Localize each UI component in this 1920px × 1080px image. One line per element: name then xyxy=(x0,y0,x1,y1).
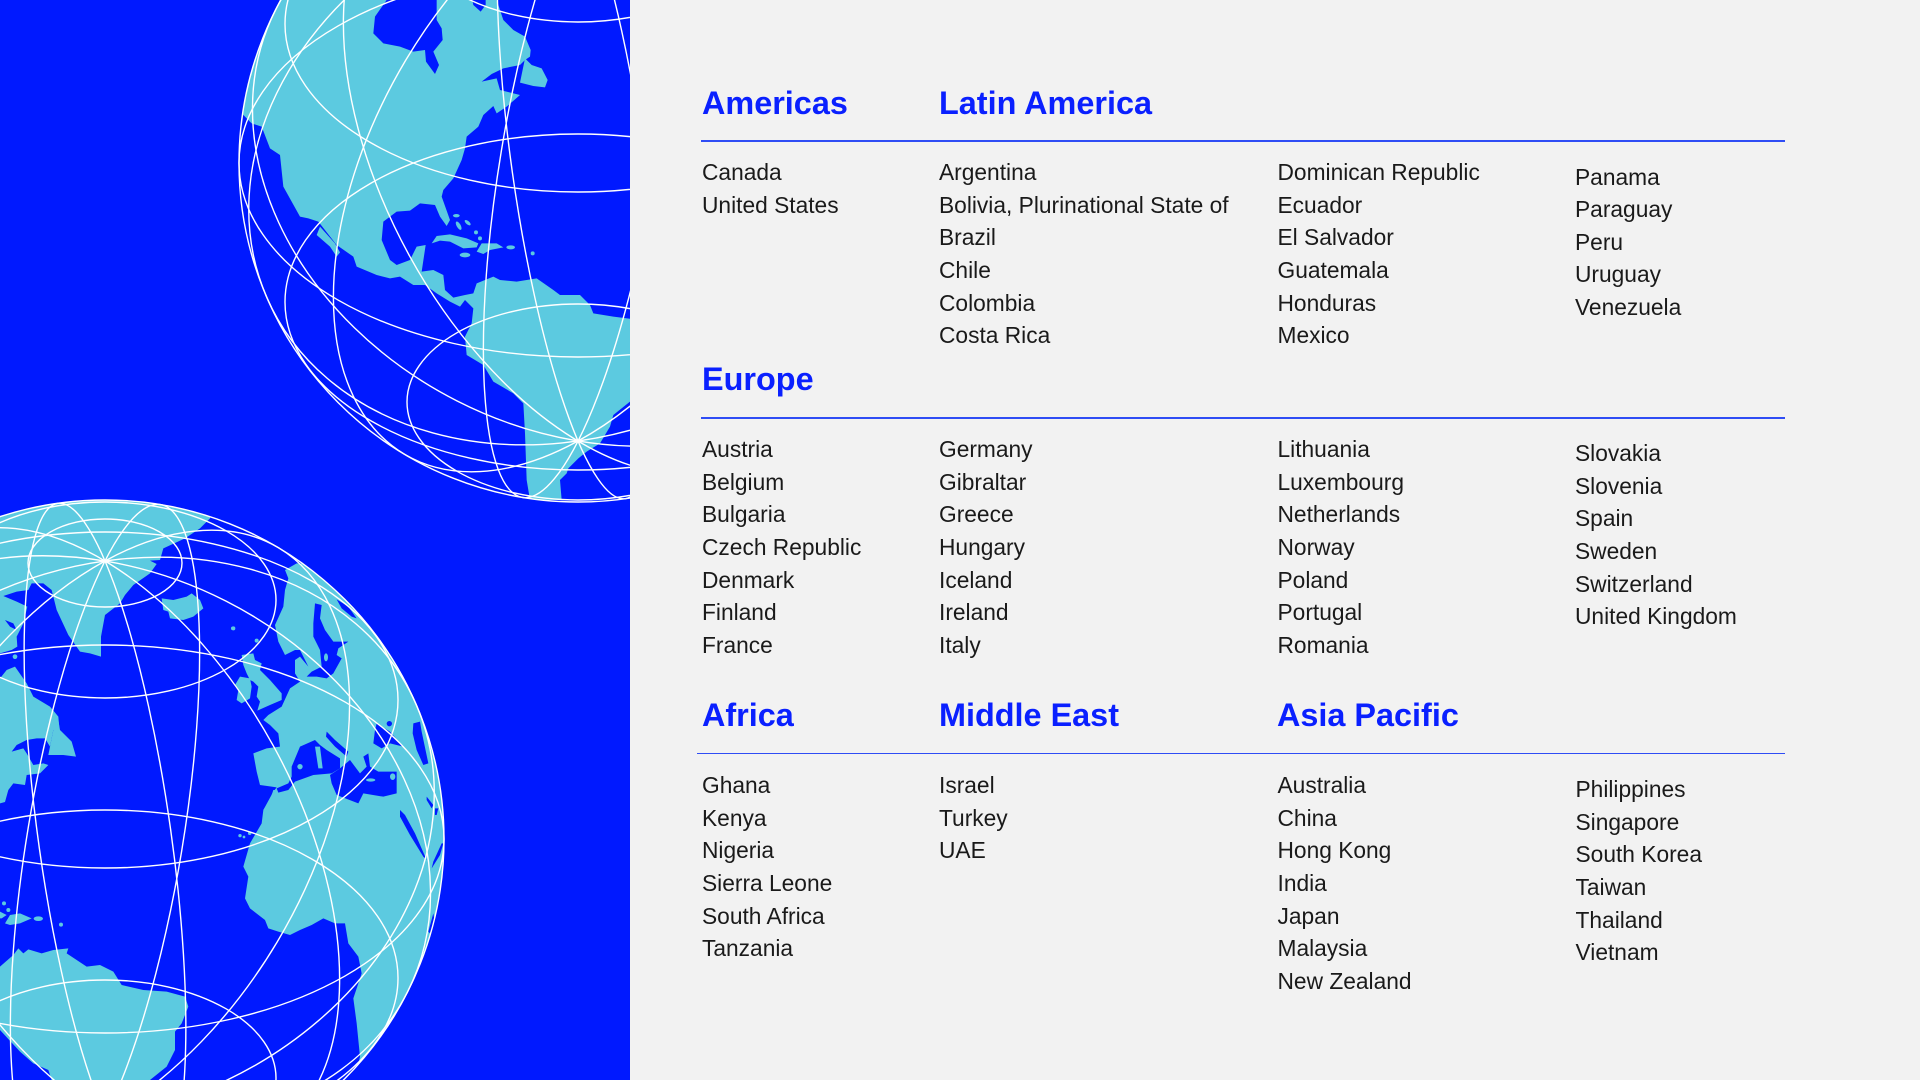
list: Middle East countries: Israel xyxy=(939,772,995,798)
list: Europe column 3: Portugal xyxy=(1278,599,1362,625)
list: Americas countries: United States xyxy=(702,192,839,218)
list: Latin America column 1: Argentina xyxy=(939,159,1036,185)
list: Asia Pacific column 2: Philippines xyxy=(1576,776,1686,802)
map: North and South America land xyxy=(243,0,630,500)
list: Europe column 4 xyxy=(1575,440,1737,629)
list: Asia Pacific column 2: Vietnam xyxy=(1576,939,1659,965)
list: Asia Pacific column 2: Thailand xyxy=(1576,907,1663,933)
list: Europe column 1: Austria xyxy=(702,436,773,462)
list: Europe column 2: Italy xyxy=(939,632,981,658)
list: Europe column 3: Luxembourg xyxy=(1278,469,1404,495)
list: Europe column 1: Belgium xyxy=(702,469,784,495)
list: Africa countries xyxy=(702,772,832,961)
list: Europe column 4: Slovakia xyxy=(1575,440,1661,466)
list: Americas countries: Canada xyxy=(702,159,782,185)
list: Latin America column 3: Peru xyxy=(1575,229,1623,255)
list: Asia Pacific column 1: Australia xyxy=(1278,772,1366,798)
list: Middle East countries xyxy=(939,772,1008,863)
list: Europe column 3: Norway xyxy=(1278,534,1355,560)
list: Europe column 1: Denmark xyxy=(702,567,794,593)
list: Europe column 4: United Kingdom xyxy=(1575,603,1737,629)
list: Latin America column 3: Paraguay xyxy=(1575,196,1672,222)
list: Europe column 2 xyxy=(939,436,1033,658)
list: Latin America column 2 xyxy=(1278,159,1480,348)
graticule: bottom globe wireframe xyxy=(0,445,528,1080)
list: Africa countries: Nigeria xyxy=(702,837,774,863)
list: Asia Pacific column 1: New Zealand xyxy=(1278,968,1412,994)
graticule: top globe wireframe xyxy=(155,0,1001,557)
list: Asia Pacific column 1: Japan xyxy=(1278,903,1340,929)
list: Asia Pacific column 2: Singapore xyxy=(1576,809,1679,835)
list: Europe column 2: Greece xyxy=(939,501,1014,527)
list: Europe column 1 xyxy=(702,436,861,658)
list: Latin America column 2: Dominican Republic xyxy=(1278,159,1480,185)
list: Africa countries: Tanzania xyxy=(702,935,793,961)
globe: Atlantic, Europe and Africa, bottom xyxy=(0,499,445,1080)
panel: blue globe illustration xyxy=(0,0,630,1080)
list: Asia Pacific column 2: South Korea xyxy=(1576,841,1702,867)
list: Europe column 2: Gibraltar xyxy=(939,469,1026,495)
list: Latin America column 1: Brazil xyxy=(939,224,996,250)
list: Asia Pacific column 1: India xyxy=(1278,870,1327,896)
list: Africa countries: Sierra Leone xyxy=(702,870,832,896)
list: Europe column 3: Romania xyxy=(1278,632,1369,658)
heading: Middle East: Middle East xyxy=(939,697,1119,733)
list: Europe column 4: Spain xyxy=(1575,505,1633,531)
list: Latin America column 1: Costa Rica xyxy=(939,322,1050,348)
list: Europe column 2: Iceland xyxy=(939,567,1012,593)
list: Europe column 1: Bulgaria xyxy=(702,501,785,527)
heading: Americas: Americas xyxy=(702,85,848,121)
list: Africa countries: Kenya xyxy=(702,805,767,831)
list: Asia Pacific column 1: Hong Kong xyxy=(1278,837,1391,863)
list: Asia Pacific column 2: Taiwan xyxy=(1576,874,1646,900)
list: Latin America column 2: Honduras xyxy=(1278,290,1376,316)
list: Africa countries: Ghana xyxy=(702,772,770,798)
list: Europe column 2: Germany xyxy=(939,436,1033,462)
list: Latin America column 1: Colombia xyxy=(939,290,1035,316)
globe: Americas, top xyxy=(238,0,630,503)
list: Latin America column 2: Ecuador xyxy=(1278,192,1362,218)
list: Europe column 2: Hungary xyxy=(939,534,1025,560)
list: Latin America column 3: Panama xyxy=(1575,164,1660,190)
list: Asia Pacific column 1: China xyxy=(1278,805,1337,831)
list: Europe column 4: Slovenia xyxy=(1575,473,1662,499)
list: Europe column 4: Switzerland xyxy=(1575,571,1693,597)
list: Latin America column 2: Guatemala xyxy=(1278,257,1389,283)
heading: Latin America: Latin America xyxy=(939,85,1152,121)
list: Europe column 3: Netherlands xyxy=(1278,501,1400,527)
list: Europe column 3: Lithuania xyxy=(1278,436,1370,462)
list: Asia Pacific column 2 xyxy=(1576,776,1702,965)
list: Middle East countries: UAE xyxy=(939,837,986,863)
list: Europe column 1: Czech Republic xyxy=(702,534,861,560)
list: Europe column 1: Finland xyxy=(702,599,777,625)
list: Latin America column 3: Venezuela xyxy=(1575,294,1681,320)
list: Latin America column 3: Uruguay xyxy=(1575,261,1661,287)
list: Europe column 2: Ireland xyxy=(939,599,1009,625)
list: Europe column 1: France xyxy=(702,632,773,658)
heading: Asia Pacific: Asia Pacific xyxy=(1277,697,1459,733)
list: Latin America column 2: El Salvador xyxy=(1278,224,1394,250)
list: Latin America column 1 xyxy=(939,159,1229,348)
list: Asia Pacific column 1 xyxy=(1278,772,1412,994)
list: Europe column 4: Sweden xyxy=(1575,538,1657,564)
list: Latin America column 2: Mexico xyxy=(1278,322,1350,348)
list: Asia Pacific column 1: Malaysia xyxy=(1278,935,1367,961)
list: Europe column 3: Poland xyxy=(1278,567,1348,593)
heading: Africa: Africa xyxy=(702,697,794,733)
list: Latin America column 3 xyxy=(1575,164,1682,320)
list: Europe column 3 xyxy=(1278,436,1404,658)
list: Latin America column 1: Chile xyxy=(939,257,991,283)
list: Latin America column 1: Bolivia, Plurinational State of xyxy=(939,192,1229,218)
map: Europe, Africa, Greenland and eastern Americas land xyxy=(0,490,473,1080)
list: Middle East countries: Turkey xyxy=(939,805,1008,831)
list: Americas countries xyxy=(702,159,839,218)
heading: Europe: Europe xyxy=(702,361,814,397)
list: Africa countries: South Africa xyxy=(702,903,825,929)
